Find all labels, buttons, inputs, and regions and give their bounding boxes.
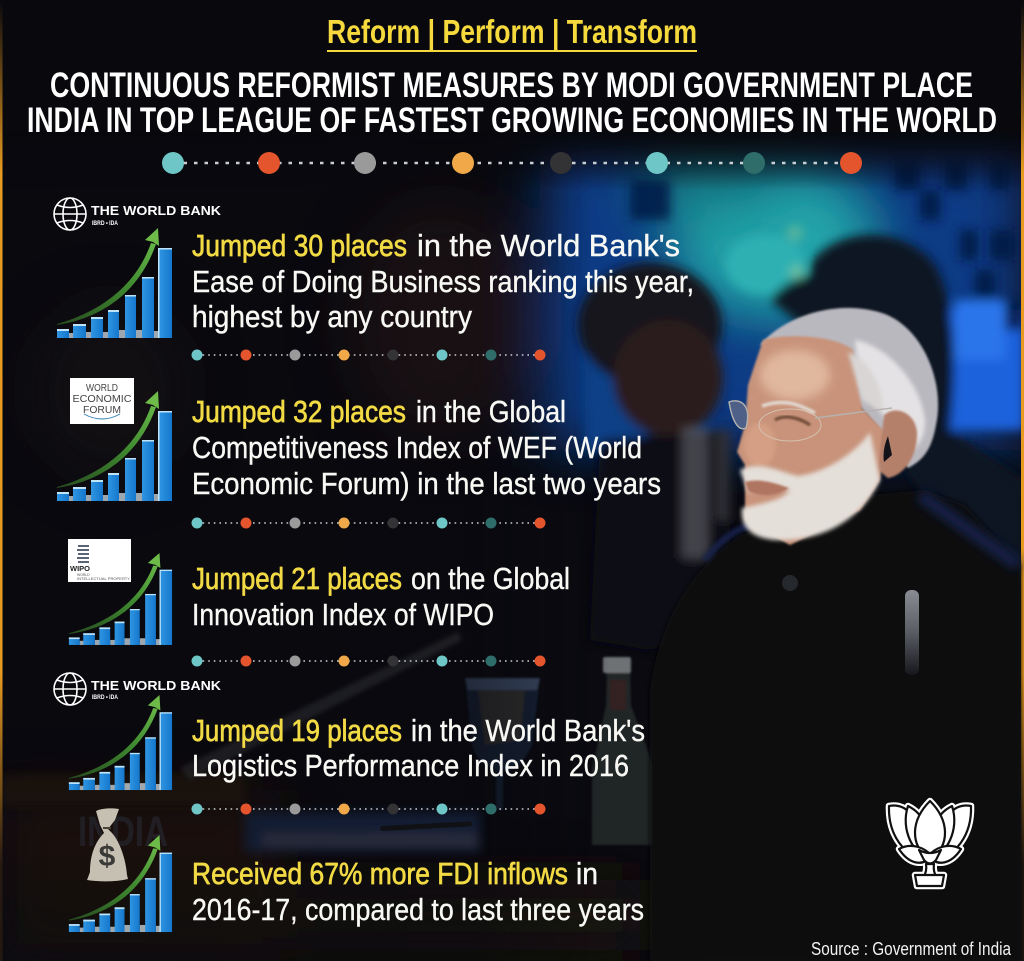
divider 2 bbox=[192, 518, 546, 528]
hair at temple bbox=[848, 352, 882, 412]
text: Innovation Index of WIPO bbox=[192, 597, 494, 632]
text: in the World Bank's bbox=[411, 713, 645, 748]
logo: World Bank: THE WORLD BANK bbox=[91, 678, 222, 693]
icon: lotus emblem bbox=[889, 801, 971, 886]
hair bbox=[760, 308, 938, 468]
item 1: World Bank ease of doing business bbox=[54, 198, 694, 338]
logo: WIPO: WIPO bbox=[70, 564, 90, 573]
logo: World Bank: IBRD • IDA bbox=[92, 694, 118, 701]
text: highest by any country bbox=[192, 299, 472, 334]
text: Jumped 30 places bbox=[192, 228, 407, 263]
text: Logistics Performance Index in 2016 bbox=[192, 748, 629, 783]
beard bbox=[740, 432, 880, 540]
text: Jumped 32 places bbox=[192, 394, 406, 429]
icon: money bag bbox=[87, 808, 128, 881]
text: Jumped 19 places bbox=[192, 713, 402, 748]
text: in the World Bank's bbox=[417, 228, 680, 263]
lapel microphone bbox=[905, 590, 919, 675]
logo: World Bank bbox=[54, 198, 222, 230]
item 5: FDI inflows bbox=[69, 808, 644, 932]
text: Competitiveness Index of WEF (World bbox=[192, 430, 642, 465]
logo: World Economic Forum: WORLD bbox=[86, 382, 118, 394]
pen bbox=[380, 821, 472, 831]
microphone stem bbox=[180, 632, 462, 780]
large dotted divider bbox=[162, 152, 862, 174]
ear bbox=[878, 410, 917, 478]
growth chart bbox=[69, 835, 172, 932]
lips bbox=[745, 481, 789, 495]
tagline: Reform | Perform | Transform: Reform | Perform | Transform bbox=[327, 13, 697, 50]
title bbox=[27, 66, 997, 140]
text: 2016-17, compared to last three years bbox=[192, 892, 644, 927]
divider 4 bbox=[192, 804, 546, 814]
logo: WIPO: INTELLECTUAL PROPERTY bbox=[77, 577, 131, 581]
logo: WIPO: WORLD bbox=[77, 573, 90, 577]
growth chart bbox=[69, 553, 172, 645]
logo: World Economic Forum: ECONOMIC bbox=[72, 393, 132, 405]
table bbox=[0, 775, 245, 805]
divider 1 bbox=[192, 350, 546, 360]
text: on the Global bbox=[411, 561, 570, 596]
bottle and glass bbox=[465, 657, 655, 845]
collar button bbox=[782, 575, 798, 591]
logo: World Bank: THE WORLD BANK bbox=[91, 203, 222, 218]
text: Jumped 21 places bbox=[192, 561, 402, 596]
text: Economic Forum) in the last two years bbox=[192, 466, 661, 501]
text bbox=[192, 856, 644, 927]
growth chart bbox=[57, 228, 172, 338]
portrait: man with white hair and beard bbox=[650, 308, 1021, 961]
jacket bbox=[650, 490, 1021, 961]
face bbox=[737, 336, 885, 545]
text bbox=[192, 561, 570, 632]
logo: WIPO bbox=[68, 539, 131, 582]
logo: World Bank bbox=[54, 673, 222, 705]
background person right bbox=[810, 235, 1024, 590]
logo: World Economic Forum bbox=[70, 378, 134, 424]
text: in the Global bbox=[416, 394, 566, 429]
item 3: WIPO global innovation bbox=[68, 539, 570, 645]
icon: money bag: $ bbox=[99, 840, 116, 873]
logo: World Bank: IBRD • IDA bbox=[92, 220, 118, 227]
text bbox=[192, 228, 694, 334]
text bbox=[192, 713, 645, 783]
growth chart bbox=[57, 391, 172, 501]
divider 3 bbox=[192, 656, 546, 666]
background person centre-right bbox=[578, 263, 722, 387]
wall pixel pattern bbox=[630, 160, 1023, 330]
logo: World Economic Forum: FORUM bbox=[83, 404, 121, 416]
text: Ease of Doing Business ranking this year, bbox=[192, 264, 694, 299]
glasses bbox=[729, 401, 892, 441]
text: Received 67% more FDI inflows bbox=[192, 856, 568, 891]
table nameplate: INDIA bbox=[78, 808, 168, 856]
text bbox=[192, 394, 661, 501]
eye and brow bbox=[775, 417, 810, 425]
item 2: WEF global competitiveness bbox=[57, 378, 661, 501]
text: in bbox=[576, 856, 598, 891]
item 4: World Bank logistics performance bbox=[54, 673, 645, 790]
growth chart bbox=[69, 695, 172, 790]
